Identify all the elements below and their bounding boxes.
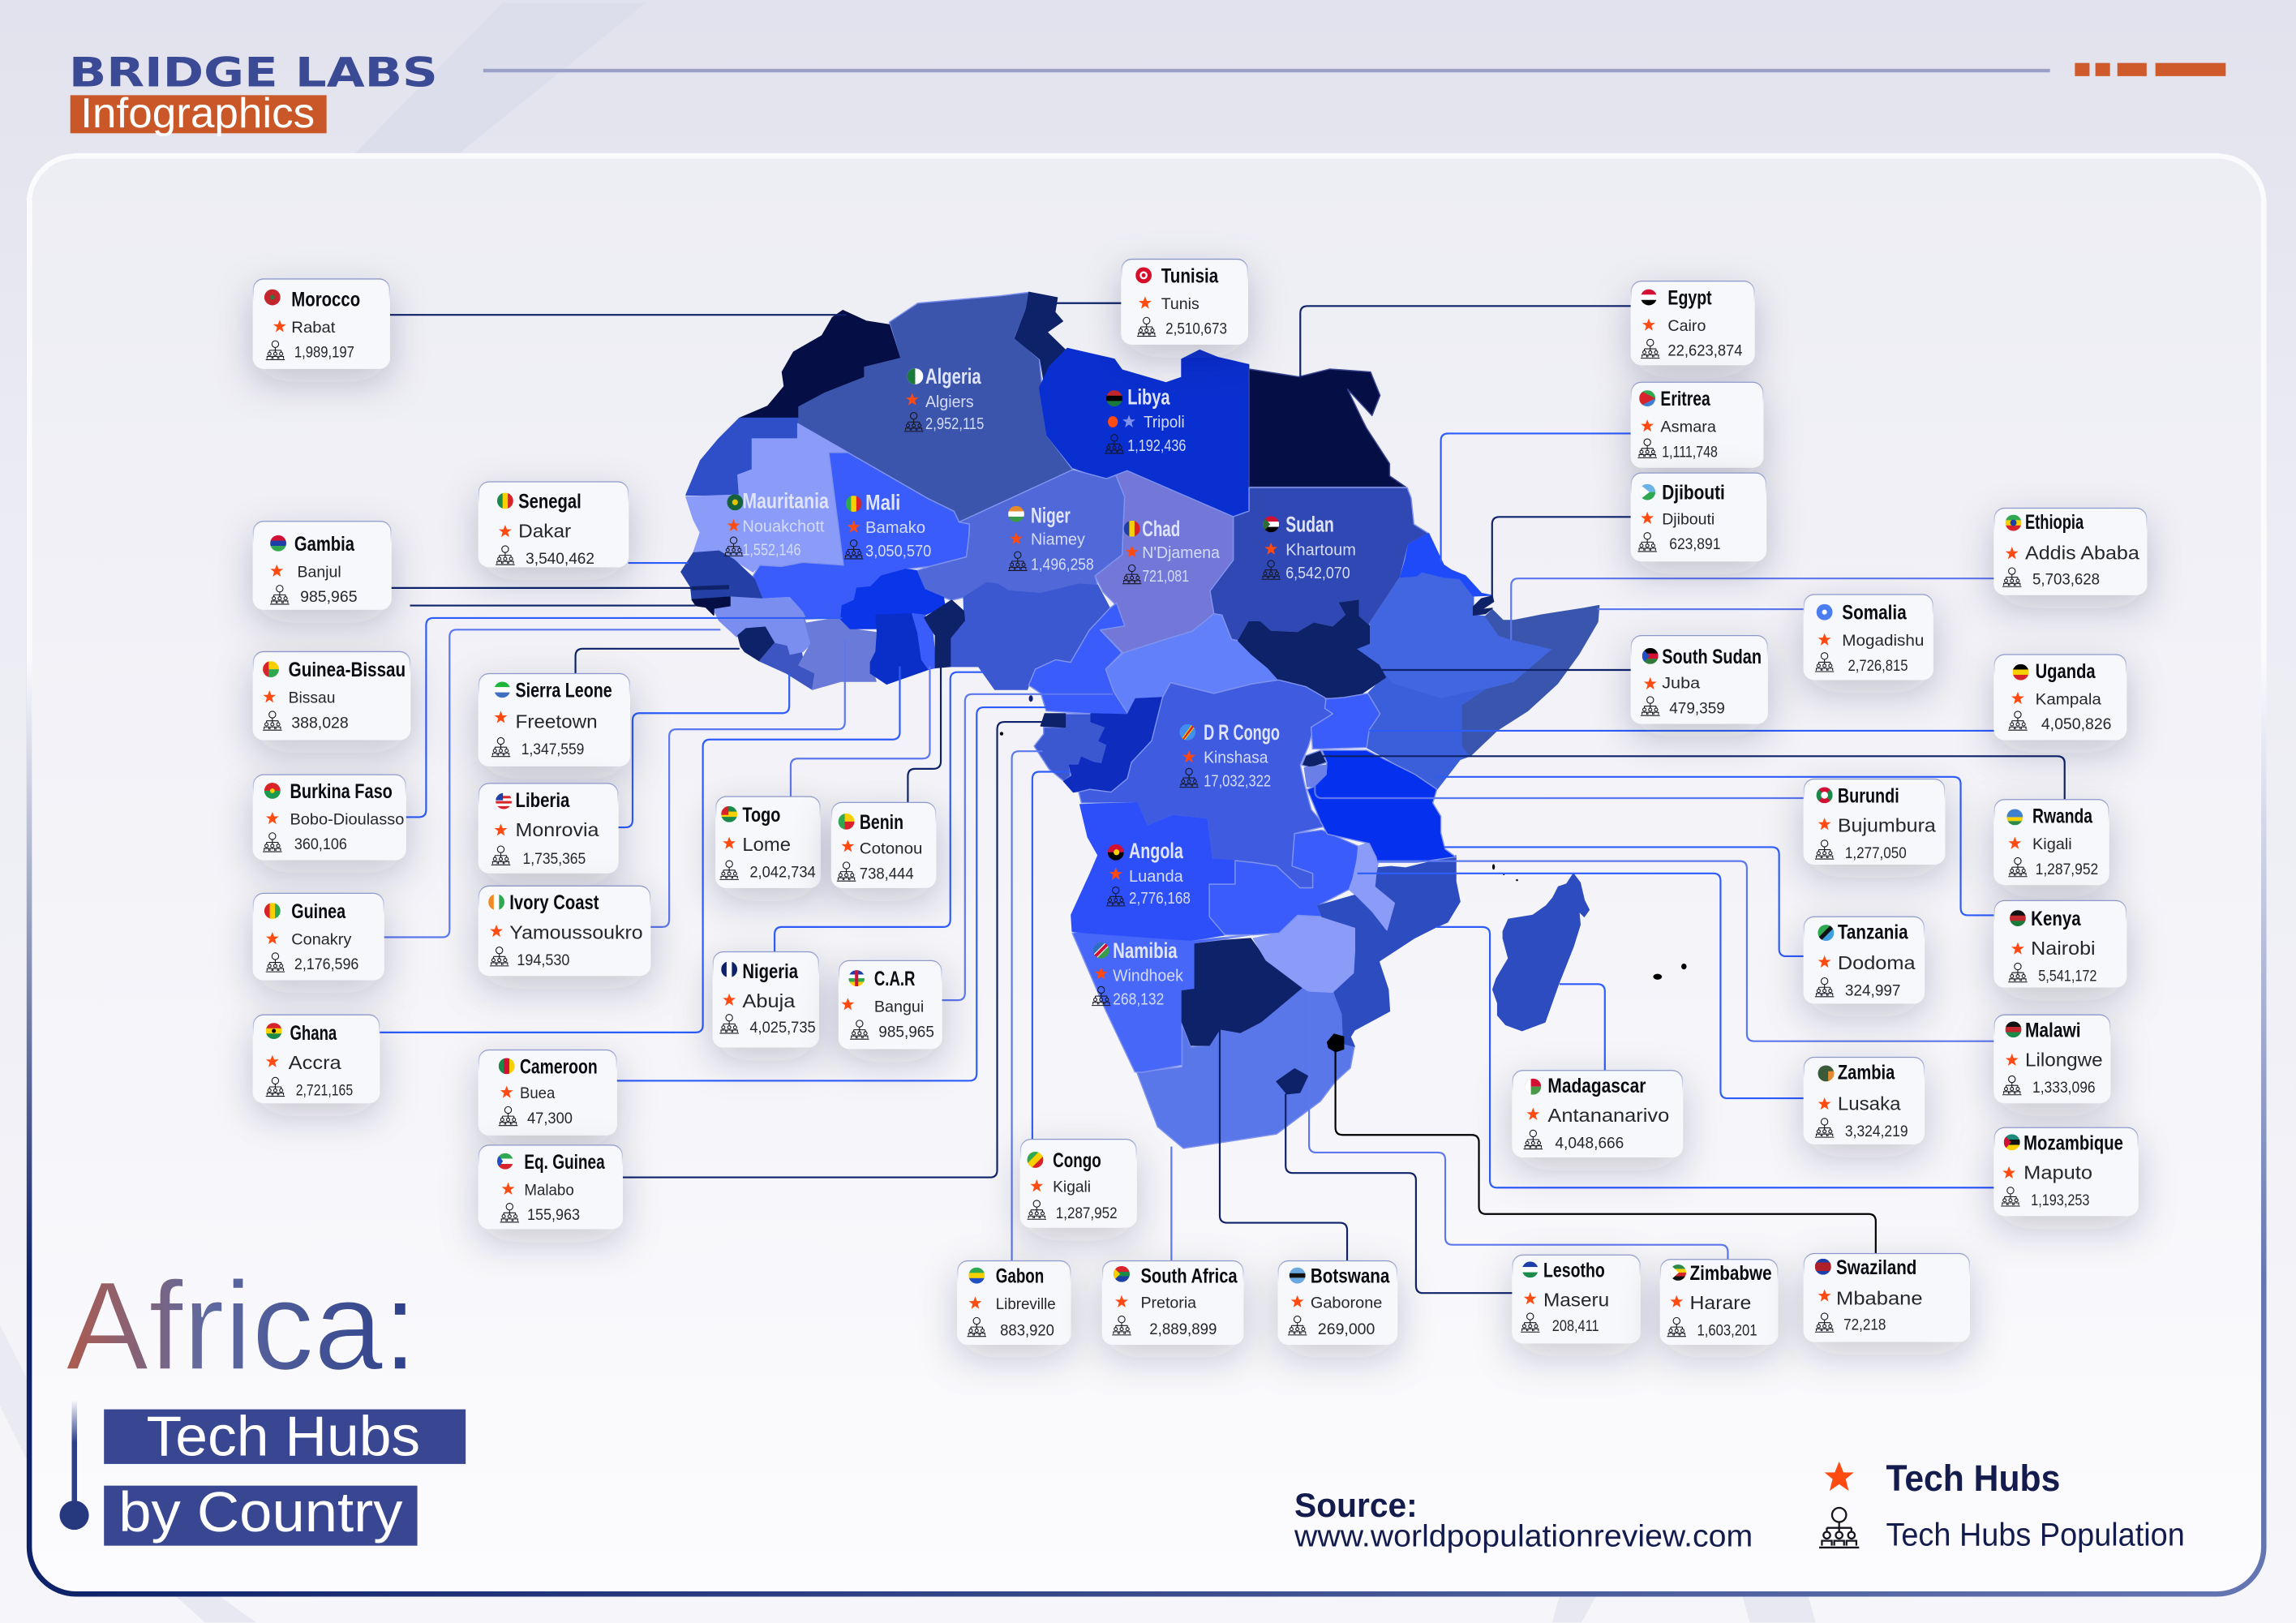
header: Bridge Labs logo: Infographics: [80, 90, 315, 137]
card: Tunisia: Tunis: [1161, 296, 1199, 313]
map label: Niger: [1008, 503, 1094, 573]
map label: Mali: Bamako: [865, 519, 925, 537]
card: Zimbabwe: Zimbabwe: [1690, 1262, 1772, 1285]
card: Tanzania: 324,997: [1845, 983, 1901, 1000]
card: Sierra Leone: Sierra Leone: [516, 679, 612, 702]
map label: Niger: Niger: [1031, 503, 1071, 528]
card: Swaziland: Mbabane: [1836, 1288, 1923, 1309]
card: Kenya: 5,541,172: [2038, 968, 2096, 985]
card: Madagascar: [1513, 1071, 1682, 1157]
card: Gambia: [253, 522, 391, 609]
card: Ivory Coast: Ivory Coast: [509, 891, 599, 914]
map label: Mauritania: [724, 487, 830, 559]
map label: Niger: Niamey: [1031, 531, 1085, 549]
card: Togo: [716, 796, 820, 887]
map label: Mali: 3,050,570: [865, 543, 931, 560]
card: Congo: Congo: [1053, 1149, 1101, 1172]
card: Eritrea: Asmara: [1660, 419, 1717, 436]
connector lines: [380, 303, 2065, 1293]
card: Tunisia: Tunisia: [1161, 264, 1219, 287]
card: Morocco: Morocco: [291, 288, 360, 311]
map label: Sudan: Sudan: [1285, 511, 1334, 536]
card: Rwanda: [1994, 800, 2109, 885]
card: C.A.R: Bangui: [874, 999, 924, 1016]
card: Uganda: Uganda: [2036, 660, 2096, 683]
card: Botswana: Gaborone: [1311, 1295, 1382, 1312]
card: Eq. Guinea: 155,963: [527, 1207, 580, 1224]
card: South Africa: [1103, 1261, 1243, 1344]
card: Egypt: 22,623,874: [1667, 343, 1743, 360]
card: Ghana: Accra: [289, 1052, 342, 1073]
card: Ivory Coast: 194,530: [517, 952, 569, 969]
map label: Chad: N'Djamena: [1142, 544, 1221, 562]
card: Zimbabwe: [1660, 1260, 1778, 1344]
card: Liberia: [479, 784, 618, 873]
card: Somalia: Somalia: [1842, 602, 1907, 625]
map label: D R Congo: D R Congo: [1204, 719, 1280, 745]
card: Benin: Cotonou: [860, 841, 922, 858]
map label: Namibia: [1092, 938, 1183, 1009]
card: Ethiopia: Ethiopia: [2025, 511, 2084, 534]
card: Botswana: Botswana: [1311, 1265, 1390, 1288]
card: Benin: Benin: [860, 811, 903, 834]
card: Senegal: [479, 482, 629, 568]
source: [1294, 1486, 1753, 1554]
map label: Mauritania: Mauritania: [742, 487, 830, 513]
card: Somalia: 2,726,815: [1848, 658, 1908, 675]
subtitle: by Country: by Country: [118, 1480, 403, 1544]
source: www.worldpopulationreview.com: [1294, 1520, 1753, 1554]
card: Senegal: 3,540,462: [526, 551, 594, 568]
card: Burundi: Bujumbura: [1838, 815, 1937, 836]
card: Swaziland: [1804, 1253, 1969, 1342]
card: Eritrea: 1,111,748: [1662, 444, 1718, 461]
card: Zimbabwe: 1,603,201: [1697, 1323, 1757, 1340]
card: Zambia: [1804, 1058, 1924, 1144]
map label: Mauritania: Nouakchott: [742, 517, 825, 535]
map label: Chad: 721,081: [1142, 568, 1189, 586]
map label: Chad: [1122, 516, 1221, 586]
card: Uganda: 4,050,826: [2041, 716, 2111, 733]
legend: [1819, 1458, 2185, 1553]
card: Madagascar: Antananarivo: [1547, 1105, 1669, 1126]
card: Sierra Leone: [479, 674, 629, 766]
card: Guinea: Guinea: [291, 900, 346, 923]
card: Madagascar: Madagascar: [1547, 1075, 1646, 1097]
card: Guinea-Bissau: 388,028: [291, 715, 349, 732]
card: Ghana: 2,721,165: [296, 1082, 353, 1099]
card: Kenya: Nairobi: [2031, 938, 2096, 959]
card: Congo: 1,287,952: [1056, 1205, 1118, 1222]
card: Lesotho: Lesotho: [1543, 1259, 1605, 1282]
map label: Sudan: Khartoum: [1285, 541, 1356, 559]
card: Kenya: [1994, 900, 2126, 987]
card: Guinea: Conakry: [291, 932, 352, 949]
card: Liberia: Liberia: [516, 789, 570, 812]
card: Gabon: Gabon: [996, 1265, 1044, 1288]
map label: Sudan: 6,542,070: [1285, 565, 1350, 582]
source: Source:: [1294, 1486, 1418, 1524]
card: Nigeria: Abuja: [742, 990, 796, 1011]
card: Malawi: Lilongwe: [2025, 1049, 2103, 1070]
card: Egypt: Cairo: [1667, 318, 1706, 335]
header: Bridge Labs logo: BRIDGE LABS: [69, 49, 438, 97]
card: Eritrea: Eritrea: [1660, 388, 1711, 410]
card: Lesotho: 208,411: [1552, 1318, 1599, 1335]
card: Congo: Kigali: [1053, 1179, 1091, 1196]
map label: Algeria: 2,952,115: [925, 415, 984, 433]
map label: Libya: 1,192,436: [1127, 437, 1186, 455]
card: Ivory Coast: [479, 886, 650, 975]
card: Rwanda: Kigali: [2032, 836, 2072, 853]
card: Malawi: 1,333,096: [2032, 1080, 2096, 1097]
card: Djibouti: Djibouti: [1662, 482, 1725, 505]
map label: Algeria: Algiers: [925, 393, 974, 411]
card: Cameroon: 47,300: [527, 1110, 573, 1127]
card: Eritrea: [1631, 382, 1763, 467]
map of Africa: [681, 292, 1599, 1149]
card: Malawi: [1994, 1015, 2110, 1103]
header rule and bars: [483, 63, 2225, 76]
card: Tanzania: Dodoma: [1838, 952, 1916, 973]
card: Zambia: Lusaka: [1838, 1093, 1901, 1114]
card: Senegal: Senegal: [518, 490, 582, 513]
card: Ethiopia: 5,703,628: [2032, 571, 2100, 588]
map label: Libya: Libya: [1127, 384, 1170, 409]
card: Ivory Coast: Yamoussoukro: [509, 921, 643, 942]
card: Djibouti: [1631, 473, 1766, 560]
card: Mozambique: Maputo: [2023, 1161, 2092, 1183]
card: Burundi: [1804, 779, 1945, 864]
card: Egypt: [1631, 281, 1754, 365]
card: Burundi: Burundi: [1838, 784, 1899, 807]
card: South Sudan: 479,359: [1669, 700, 1725, 717]
card: Cameroon: Cameroon: [520, 1055, 598, 1078]
card: Ghana: Ghana: [290, 1022, 337, 1045]
card: Gambia: 985,965: [300, 589, 358, 606]
map label: Namibia: Windhoek: [1113, 968, 1183, 985]
map label: Libya: Tripoli: [1144, 414, 1185, 432]
map label: Mali: [844, 489, 931, 560]
card: Tanzania: Tanzania: [1838, 921, 1908, 943]
header: Bridge Labs logo: [69, 49, 438, 137]
card: Mozambique: Mozambique: [2023, 1131, 2123, 1154]
card: Gabon: 883,920: [1000, 1323, 1054, 1340]
card: Zambia: 3,324,219: [1845, 1123, 1908, 1140]
card: C.A.R: [839, 960, 942, 1049]
card: Burkina Faso: Bobo-Dioulasso: [290, 811, 404, 828]
card: Mozambique: 1,193,253: [2031, 1192, 2089, 1209]
card: South Sudan: Juba: [1662, 676, 1701, 693]
card: Botswana: [1278, 1261, 1397, 1344]
map label: D R Congo: 17,032,322: [1204, 773, 1271, 791]
card: Lesotho: Maseru: [1543, 1289, 1609, 1310]
card: South Africa: South Africa: [1140, 1265, 1238, 1288]
card: Gabon: Libreville: [996, 1296, 1056, 1313]
card: Nigeria: 4,025,735: [749, 1020, 816, 1037]
card: Tanzania: [1804, 917, 1924, 1003]
card: South Sudan: [1631, 636, 1767, 723]
title stem with dot: [59, 1400, 89, 1530]
map label: Angola: Luanda: [1129, 868, 1184, 886]
card: Gabon: [958, 1261, 1071, 1344]
card: Somalia: [1804, 595, 1933, 680]
card: Ethiopia: Addis Ababa: [2025, 543, 2140, 564]
card: Benin: 738,444: [860, 865, 914, 882]
card: Burundi: 1,277,050: [1845, 845, 1907, 862]
map label: Namibia: 268,132: [1113, 991, 1164, 1009]
card: Sierra Leone: Freetown: [516, 711, 598, 732]
card: Cameroon: Buea: [520, 1085, 556, 1102]
card: Gambia: Banjul: [298, 564, 341, 581]
map label: Libya: [1105, 384, 1186, 455]
islands: [1000, 695, 1687, 980]
card: Kenya: Kenya: [2031, 908, 2081, 930]
card: Uganda: [1994, 655, 2126, 740]
card: Togo: 2,042,734: [749, 864, 816, 881]
card: Botswana: 269,000: [1318, 1321, 1375, 1338]
card: Tunisia: [1122, 260, 1247, 344]
card: Eq. Guinea: Malabo: [524, 1182, 574, 1199]
card: Nigeria: Nigeria: [742, 960, 799, 983]
card: Uganda: Kampala: [2036, 691, 2101, 708]
card: Rwanda: Rwanda: [2032, 805, 2093, 828]
card: Togo: Togo: [742, 804, 780, 827]
card: Liberia: Monrovia: [516, 819, 599, 840]
map label: Namibia: Namibia: [1113, 938, 1178, 963]
card: Madagascar: 4,048,666: [1555, 1135, 1624, 1152]
map label: Mauritania: 1,552,146: [742, 541, 801, 559]
legend: Tech Hubs Population: [1886, 1518, 2185, 1553]
card: Burkina Faso: 360,106: [294, 836, 347, 853]
card: Sierra Leone: 1,347,559: [521, 741, 584, 758]
card: Congo: [1020, 1140, 1136, 1227]
card: Tunisia: 2,510,673: [1165, 321, 1227, 338]
card: Djibouti: Djibouti: [1662, 511, 1714, 528]
card: Togo: Lome: [742, 834, 791, 855]
card: C.A.R: C.A.R: [874, 968, 915, 990]
card: South Sudan: South Sudan: [1662, 646, 1762, 668]
map label: Chad: Chad: [1142, 516, 1180, 541]
card: Burkina Faso: [253, 775, 406, 860]
map label: Sudan: [1261, 511, 1356, 582]
subtitle: Tech Hubs: Tech Hubs: [147, 1405, 420, 1468]
legend: Tech Hubs: [1886, 1458, 2060, 1499]
map label: Angola: [1106, 838, 1191, 908]
map label: Niger: 1,496,258: [1031, 556, 1094, 573]
card: Egypt: Egypt: [1667, 287, 1712, 310]
card: Liberia: 1,735,365: [523, 851, 586, 868]
map label: Angola: Angola: [1129, 838, 1184, 863]
card: Burkina Faso: Burkina Faso: [290, 780, 393, 803]
map label: D R Congo: Kinshasa: [1204, 749, 1268, 767]
card: South Africa: 2,889,899: [1149, 1321, 1217, 1338]
card: Mozambique: [1994, 1127, 2138, 1216]
card: Eq. Guinea: Eq. Guinea: [524, 1151, 605, 1174]
card: Djibouti: 623,891: [1669, 536, 1720, 553]
card: Swaziland: 72,218: [1843, 1316, 1886, 1333]
card: Zimbabwe: Harare: [1690, 1292, 1751, 1313]
card: Nigeria: [713, 952, 818, 1047]
card: Morocco: 1,989,197: [294, 345, 354, 362]
card: Morocco: [253, 279, 389, 368]
map label: Angola: 2,776,168: [1129, 890, 1191, 908]
card: Lesotho: [1513, 1255, 1640, 1343]
map label: Algeria: Algeria: [925, 363, 981, 389]
card: Ethiopia: [1994, 508, 2147, 595]
card: Eq. Guinea: [479, 1145, 622, 1229]
map label: Mali: Mali: [865, 489, 900, 514]
card: Rwanda: 1,287,952: [2036, 861, 2098, 878]
card: Gambia: Gambia: [294, 533, 355, 556]
map label: Algeria: [904, 363, 984, 433]
card: Guinea-Bissau: Guinea-Bissau: [289, 659, 406, 681]
card: Malawi: Malawi: [2025, 1019, 2081, 1041]
card: Morocco: Rabat: [291, 320, 336, 337]
card: Benin: [832, 802, 936, 887]
card: Guinea: 2,176,596: [294, 956, 358, 973]
card: Swaziland: Swaziland: [1836, 1256, 1916, 1279]
card: Senegal: Dakar: [518, 521, 571, 542]
card: Ghana: [253, 1015, 380, 1103]
card: C.A.R: 985,965: [878, 1024, 934, 1041]
card: Cameroon: [479, 1050, 616, 1135]
title: Africa: Africa:: [66, 1255, 418, 1396]
card: Guinea: [253, 893, 384, 980]
card: Zambia: Zambia: [1838, 1062, 1895, 1084]
card: Guinea-Bissau: Bissau: [289, 690, 335, 707]
card: South Africa: Pretoria: [1140, 1295, 1197, 1312]
card: Somalia: Mogadishu: [1842, 633, 1924, 650]
card: Guinea-Bissau: [253, 651, 410, 740]
map label: D R Congo: [1179, 719, 1280, 791]
